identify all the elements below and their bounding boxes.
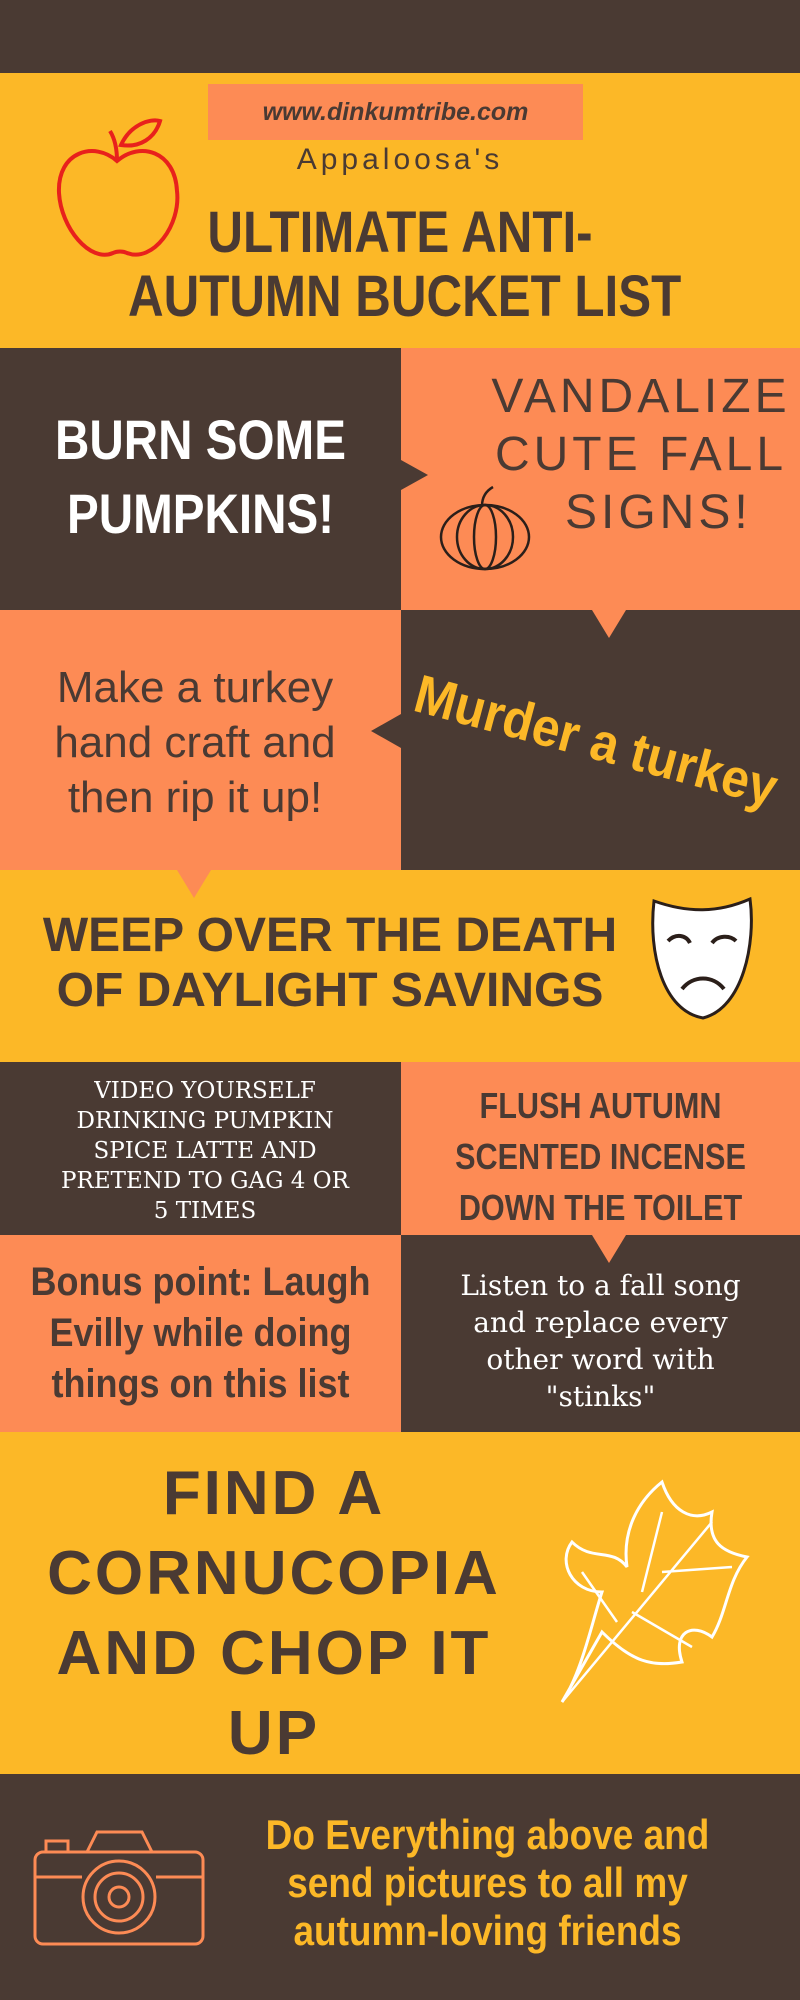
panel: video latte: 5 TIMES: [154, 1198, 256, 1224]
panel: cornucopia: FIND A: [163, 1459, 385, 1528]
icon: apple: [56, 118, 180, 257]
arrow: right: [401, 460, 428, 490]
panel: footer: [0, 1774, 800, 2000]
panel: video latte: PRETEND TO GAG 4 OR: [61, 1168, 349, 1194]
panel: turkey craft: [0, 610, 401, 870]
panel: flush incense: SCENTED INCENSE: [455, 1136, 746, 1177]
top band: [0, 0, 800, 73]
panel: weep: [0, 870, 800, 1062]
icon: leaf: [560, 1480, 750, 1703]
panel: cornucopia: CORNUCOPIA: [47, 1539, 501, 1608]
text: footer: [266, 1811, 709, 1954]
panel: bonus point: Evilly while doing: [49, 1311, 352, 1355]
panel: video latte: VIDEO YOURSELF: [94, 1078, 316, 1104]
arrow: down: [592, 610, 626, 638]
icon: pumpkin: [440, 486, 530, 570]
url box: www.dinkumtribe.com: [263, 98, 528, 126]
panel: video latte: [0, 1062, 401, 1235]
panel: flush incense: [401, 1062, 800, 1235]
panel: murder turkey: [401, 610, 800, 870]
panel: turkey craft: hand craft and: [54, 718, 336, 767]
panel: fall song: other word with: [486, 1343, 715, 1376]
panel: bonus point: [0, 1235, 401, 1432]
text: footer: autumn-loving friends: [293, 1907, 682, 1954]
panel: cornucopia: [0, 1432, 800, 1774]
panel: cornucopia: UP: [228, 1699, 320, 1768]
panel: vandalize: CUTE FALL: [495, 428, 787, 481]
arrow: down flush: [592, 1235, 626, 1263]
text: footer: Do Everything above and: [266, 1811, 709, 1858]
header panel: [0, 73, 800, 348]
icon: mask: [651, 896, 753, 1020]
panel: video latte: SPICE LATTE AND: [93, 1138, 317, 1164]
arrow: down orange: [177, 870, 211, 898]
panel: fall song: and replace every: [473, 1306, 728, 1339]
arrow: left: [371, 714, 401, 748]
panel: turkey craft: Make a turkey: [57, 663, 333, 712]
title: AUTUMN BUCKET LIST: [128, 264, 681, 329]
panel: fall song: [401, 1235, 800, 1432]
panel: vandalize: [401, 348, 800, 610]
subtitle: Appaloosa's: [297, 143, 503, 176]
title: ULTIMATE ANTI-: [207, 200, 593, 265]
panel: turkey craft: then rip it up!: [68, 773, 322, 822]
panel: flush incense: DOWN THE TOILET: [459, 1187, 742, 1228]
panel: weep: WEEP OVER THE DEATH: [43, 909, 617, 962]
panel: vandalize: VANDALIZE: [491, 370, 791, 423]
panel: murder turkey: Murder a turkey: [408, 664, 784, 818]
panel: fall song: "stinks": [546, 1380, 655, 1413]
panel: burn pumpkins: BURN SOME: [55, 408, 346, 471]
title: [128, 200, 681, 329]
panel: vandalize: SIGNS!: [565, 486, 752, 539]
panel: weep: OF DAYLIGHT SAVINGS: [57, 964, 603, 1017]
panel: cornucopia: AND CHOP IT: [57, 1619, 491, 1688]
panel: flush incense: FLUSH AUTUMN: [480, 1085, 721, 1126]
panel: fall song: Listen to a fall song: [460, 1269, 741, 1302]
panel: burn pumpkins: [0, 348, 401, 610]
panel: video latte: DRINKING PUMPKIN: [77, 1108, 333, 1134]
panel: burn pumpkins: PUMPKINS!: [67, 482, 334, 545]
text: footer: send pictures to all my: [287, 1859, 688, 1906]
panel: bonus point: things on this list: [52, 1362, 349, 1406]
icon: camera: [34, 1830, 204, 1946]
url box: [208, 84, 583, 140]
panel: bonus point: Bonus point: Laugh: [31, 1260, 370, 1304]
